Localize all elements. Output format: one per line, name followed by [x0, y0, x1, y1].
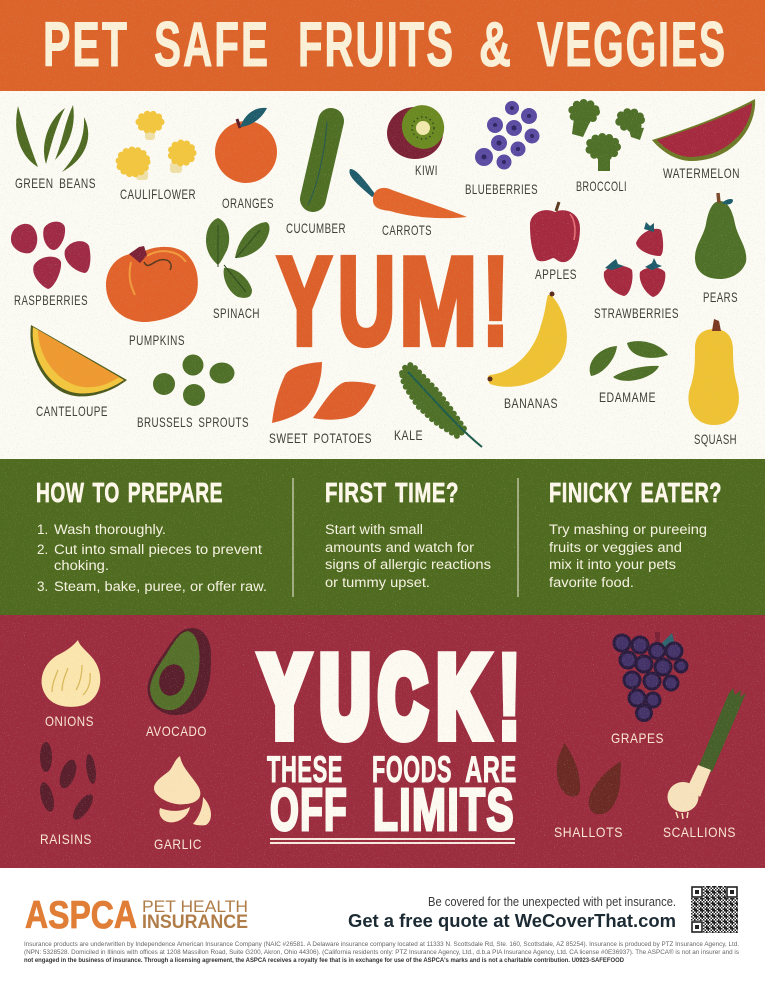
label: ONIONS [45, 713, 94, 729]
icon: banana [488, 292, 567, 387]
food: pumpkins [106, 246, 198, 348]
label: AVOCADO [146, 723, 207, 739]
label: RASPBERRIES [14, 292, 88, 308]
label: SQUASH [694, 431, 737, 447]
icon: grapes [614, 632, 687, 720]
label: BRUSSELS SPROUTS [137, 414, 249, 430]
food: brussels sprouts [137, 354, 249, 430]
icon: avocado [148, 628, 211, 715]
heading: yuck: K [438, 634, 486, 759]
title: & [479, 10, 511, 80]
label: SHALLOTS [554, 824, 623, 840]
icon: raspberries [11, 222, 90, 289]
icon: green beans [16, 105, 88, 172]
food: kiwi [387, 98, 451, 178]
heading: yuck: U [320, 634, 370, 759]
label: CUCUMBER [286, 220, 346, 236]
food: blueberries [465, 101, 540, 197]
logo: ASPCA pet health insurance: INSURANCE [142, 912, 248, 933]
food: squash [688, 319, 739, 447]
icon: canteloupe [30, 325, 127, 396]
heading: first time: FIRST TIME? [325, 477, 459, 508]
heading: these foods are: THESE [267, 749, 343, 790]
food: kale [394, 365, 482, 447]
heading: YUM: M [399, 231, 477, 371]
label: PEARS [703, 289, 738, 305]
text block: finicky eater [549, 522, 707, 590]
icon: pumpkin [106, 246, 198, 322]
heading: yuck: ! [497, 629, 522, 766]
text block: legal fine print: (NPN: 5328528. Domiciled in Illinois with offices at 1208 Massillon Road, Suite G200, Akron, Ohio 44306). (California residents only: PTZ Insurance Agency, Ltd., d.b.a PIA Insurance Agency, Ltd. CA license #0E36937). The ASPCA® is not an insurer and is [24, 948, 740, 956]
text block: first time [325, 522, 491, 590]
heading: yuck: Y [261, 634, 308, 759]
label: BLUEBERRIES [465, 181, 538, 197]
food: carrots [349, 169, 467, 238]
label: SWEET POTATOES [269, 430, 372, 446]
icon: raisins [37, 742, 98, 823]
icon: onion [42, 640, 100, 707]
text block: prepare steps: choking. [54, 558, 109, 573]
heading: YUM: Y [277, 231, 331, 371]
title [43, 10, 727, 80]
text block: finicky eater: Try mashing or pureeing [549, 522, 707, 537]
text block: prepare steps: Cut into small pieces to prevent [54, 542, 262, 557]
panel: unsafe foods [37, 628, 746, 852]
label: GARLIC [154, 836, 202, 852]
icon: broccoli [572, 103, 644, 171]
icon: squash [688, 319, 739, 425]
title: SAFE [154, 10, 270, 80]
icon: carrot [349, 169, 467, 218]
icon: cauliflower [119, 114, 193, 180]
text block: prepare steps: Steam, bake, puree, or offer raw. [54, 579, 267, 594]
text block: first time: amounts and watch for [325, 540, 475, 555]
food: scallions [663, 688, 746, 840]
heading: YUM: ! [482, 231, 509, 371]
food: garlic [154, 756, 211, 852]
heading: these foods are: ARE [465, 749, 517, 790]
label: ORANGES [222, 195, 274, 211]
text block: prepare steps: 3. [37, 579, 48, 594]
icon: sweet potatoes [272, 362, 376, 423]
text block: finicky eater: mix it into your pets [549, 557, 676, 572]
food: cucumber [286, 121, 346, 236]
label: APPLES [535, 266, 577, 282]
label: EDAMAME [599, 389, 656, 405]
food: strawberries [594, 222, 679, 321]
text block: prepare steps: 2. [37, 542, 48, 557]
label: SPINACH [213, 305, 260, 321]
title: FRUITS [298, 10, 455, 80]
text block: first time: or tummy upset. [325, 575, 430, 590]
text block: first time: Start with small [325, 522, 423, 537]
label: SCALLIONS [663, 824, 736, 840]
label: RAISINS [40, 831, 92, 847]
food: raisins [37, 742, 98, 847]
heading: yuck: C [379, 634, 426, 759]
food: onions [42, 640, 100, 729]
text block: prepare steps: 1. [37, 522, 48, 537]
label: BROCCOLI [576, 178, 627, 194]
food: raspberries [11, 222, 90, 308]
label: CAULIFLOWER [120, 186, 196, 202]
heading: off limits [270, 777, 515, 843]
text block: legal fine print: Insurance products are underwritten by Independence American Insurance Company (NAIC #26581. A Delaware insurance company located at 11333 N. Scottsdale Rd, Ste. 160, Scottsdale, AZ 85254). Insurance is produced by PTZ Insurance Agency, Ltd. [24, 941, 739, 948]
food: pears [695, 193, 746, 305]
panel: tips [36, 477, 722, 597]
title: PET [43, 10, 129, 80]
icon: kiwi [387, 98, 451, 159]
heading: off limits: OFF [270, 777, 348, 843]
text block: legal fine print: not engaged in the business of insurance. Through a licensing agreement, the ASPCA receives a royalty fee that is in exchange for use of the ASPCA's marks and is not a charitable contribution. U0923-SAFEFOOD [24, 957, 624, 964]
label: CANTELOUPE [36, 403, 108, 419]
label: KALE [394, 427, 423, 443]
icon: orange [215, 108, 277, 183]
text block: prepare steps [37, 522, 267, 594]
text block: call to action: Get a free quote at WeCoverThat.com [348, 910, 676, 931]
food: bananas [488, 292, 567, 411]
heading: yuck [261, 629, 522, 766]
food: cauliflower [119, 114, 196, 202]
label: CARROTS [382, 222, 432, 238]
food: apples [530, 202, 580, 282]
text block: finicky eater: favorite food. [549, 575, 634, 590]
text block: finicky eater: fruits or veggies and [549, 540, 682, 555]
icon: strawberries [604, 222, 665, 297]
heading: these foods are: FOODS [372, 749, 452, 790]
icon: brussels sprouts [153, 354, 234, 406]
food: green beans [15, 105, 96, 191]
text block: tagline: Be covered for the unexpected with pet insurance. [428, 895, 676, 909]
label: PUMPKINS [129, 332, 185, 348]
food: broccoli [572, 103, 644, 194]
label: STRAWBERRIES [594, 305, 679, 321]
food: canteloupe [30, 325, 127, 419]
icon: spinach [206, 218, 269, 298]
food: edamame [590, 341, 668, 405]
logo: ASPCA pet health insurance [25, 894, 248, 937]
food: spinach [206, 218, 269, 321]
heading: YUM: U [338, 231, 395, 371]
food: shallots [554, 743, 623, 840]
icon: QR code [691, 886, 738, 933]
label: KIWI [415, 162, 438, 178]
text block: legal fine print [24, 941, 740, 964]
icon: garlic [154, 756, 211, 825]
food: grapes [611, 632, 687, 746]
icon: shallots [557, 743, 621, 814]
food: watermelon [652, 99, 755, 181]
icon: pear [695, 193, 746, 279]
icon: edamame [590, 341, 668, 381]
icon: scallion [668, 688, 746, 819]
food: sweet potatoes [269, 362, 376, 446]
text block: first time: signs of allergic reactions [325, 557, 491, 572]
panel: footer [24, 886, 740, 964]
label: GRAPES [611, 730, 664, 746]
logo: ASPCA pet health insurance: PET HEALTH [142, 897, 248, 916]
panel: safe foods [11, 98, 755, 447]
logo: ASPCA pet health insurance: ASPCA [25, 894, 137, 937]
heading: YUM [277, 231, 509, 371]
heading: these foods are [267, 749, 517, 790]
icon: cucumber [308, 121, 331, 205]
food: avocado [146, 628, 211, 739]
text block: prepare steps: Wash thoroughly. [54, 522, 166, 537]
icon: kale [402, 365, 482, 447]
heading: off limits: LIMITS [373, 777, 515, 843]
icon: apple [530, 202, 580, 262]
icon: watermelon [652, 99, 755, 161]
heading: how to prepare: HOW TO PREPARE [36, 477, 223, 508]
food: oranges [215, 108, 277, 211]
icon: blueberries [475, 101, 540, 170]
label: BANANAS [504, 395, 558, 411]
label: GREEN BEANS [15, 175, 96, 191]
